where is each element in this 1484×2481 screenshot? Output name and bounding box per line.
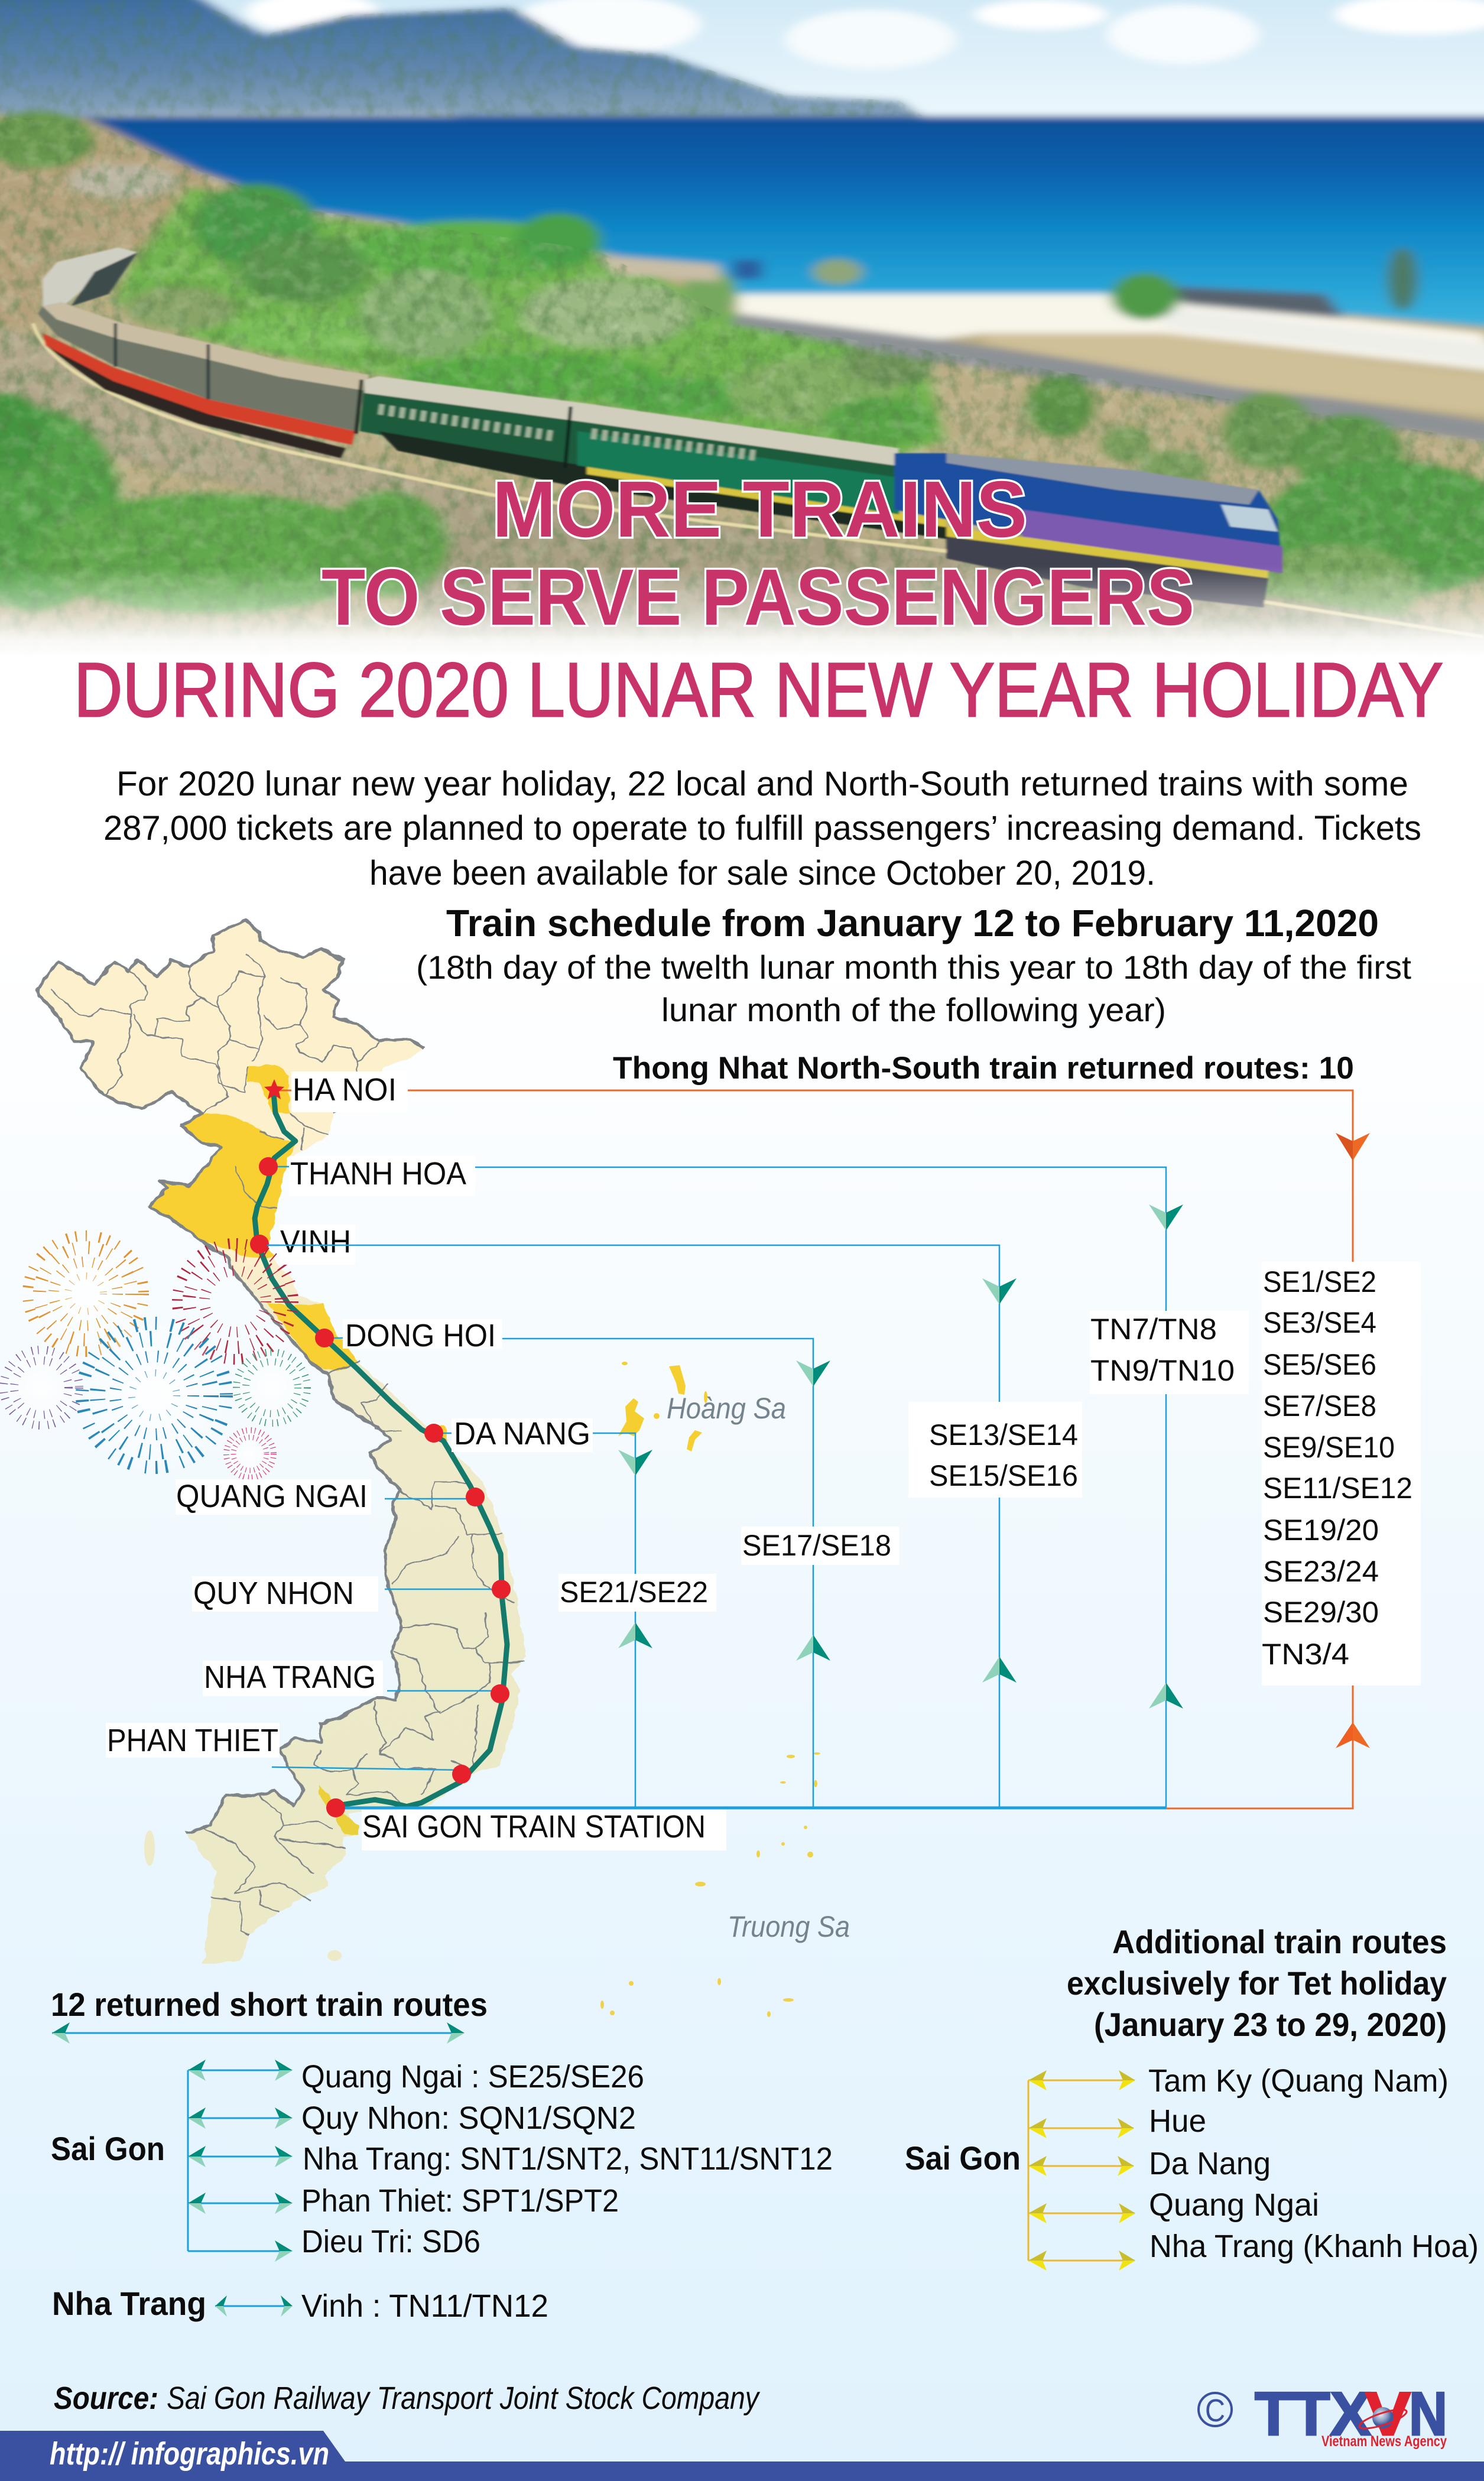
North-South routes heading: Thong Nhat North-South train returned routes: 10 — [613, 1051, 1354, 1086]
codes: Thong Nhat list: SE5/SE6 — [1263, 1348, 1376, 1381]
firework: orange — [22, 1230, 150, 1358]
marker: Ha Noi star — [264, 1079, 284, 1099]
footer bar — [0, 2431, 1484, 2481]
title line 1: MORE TRAINS — [492, 465, 1027, 554]
codes: Thong Nhat list — [1262, 1265, 1412, 1671]
route: Quy Nhon: Quy Nhon: SQN1/SQN2 — [301, 2100, 636, 2136]
icon: copyright: C — [1205, 2393, 1225, 2428]
route: Da Nang — [593, 1433, 635, 1808]
main trunk from Sai Gon — [338, 1806, 1166, 1810]
train — [33, 248, 1484, 637]
codes: Thong Nhat list: SE9/SE10 — [1263, 1431, 1395, 1464]
firework: red — [177, 1243, 293, 1359]
label: Hoang Sa: Hoàng Sa — [667, 1392, 786, 1425]
arrows on vertical routes — [618, 1133, 1370, 1748]
label: Da Nang: DA NANG — [454, 1416, 590, 1451]
route: Phan Thiet: Phan Thiet: SPT1/SPT2 — [301, 2183, 619, 2219]
schedule heading: Train schedule from January 12 to February 11,2020 — [446, 902, 1379, 944]
connector from Nha Trang — [215, 2295, 293, 2317]
logo: copyright and TTXVN — [1199, 2380, 1447, 2450]
Vinh leader passing over label — [267, 1245, 355, 1246]
province lines — [51, 954, 524, 1935]
fireworks — [0, 1230, 312, 1481]
label: Quang Ngai: QUANG NGAI — [176, 1479, 368, 1514]
codes: SE17/SE18: SE17/SE18 — [742, 1529, 891, 1562]
codes: SE13-SE16: SE15/SE16 — [929, 1459, 1078, 1492]
map base: land, provinces, border — [37, 920, 527, 1965]
train code labels — [558, 1262, 1421, 1686]
footer url: http:// infographics.vn — [50, 2436, 329, 2472]
connectors — [1028, 2070, 1135, 2271]
route: Ha Noi orange — [278, 1090, 1353, 1808]
label: Quy Nhon: QUY NHON — [193, 1576, 354, 1611]
intro paragraph — [103, 765, 1421, 892]
intro paragraph: For 2020 lunar new year holiday, 22 local and North-South returned trains with some — [116, 765, 1408, 803]
route: Dong Hoi — [502, 1339, 813, 1808]
photo grain — [0, 118, 1484, 659]
mountain texture — [0, 0, 927, 120]
land mass — [37, 920, 527, 1965]
leader lines from stations — [269, 1167, 492, 1770]
codes: Thong Nhat list: SE23/24 — [1263, 1555, 1379, 1588]
label: Dong Hoi: DONG HOI — [345, 1318, 496, 1353]
firework: pink — [223, 1427, 277, 1481]
map of Vietnam — [37, 920, 850, 2017]
codes: Thong Nhat list: SE11/SE12 — [1263, 1472, 1412, 1505]
heading arrow — [52, 2022, 465, 2044]
route: Vinh — [267, 1245, 999, 1808]
label: Vinh: VINH — [280, 1224, 351, 1259]
heading — [1067, 1923, 1447, 2043]
codes: SE13-SE16 — [929, 1418, 1078, 1492]
codes: Thong Nhat list: SE1/SE2 — [1263, 1265, 1376, 1298]
title — [74, 465, 1443, 733]
route: Quang Ngai: Quang Ngai — [1149, 2187, 1319, 2223]
border line — [37, 920, 424, 1833]
codes: Thong Nhat list: SE19/20 — [1263, 1514, 1379, 1547]
wordmark: N — [1409, 2380, 1447, 2448]
route: Nha Trang: Nha Trang (Khanh Hoa) — [1149, 2229, 1479, 2264]
route: Thanh Hoa — [475, 1167, 1166, 1808]
schedule sub-heading: lunar month of the following year) — [661, 991, 1166, 1028]
route: Vinh: Vinh : TN11/TN12 — [301, 2288, 548, 2324]
heading: (January 23 to 29, 2020) — [1094, 2006, 1447, 2043]
route: Nha Trang: Nha Trang: SNT1/SNT2, SNT11/SNT12 — [303, 2141, 833, 2177]
origin: Sai Gon: Sai Gon — [905, 2139, 1021, 2177]
heading: 12 returned short train routes — [51, 1986, 488, 2023]
hero bottom cover — [0, 656, 1484, 691]
codes: Thong Nhat list: SE3/SE4 — [1263, 1306, 1376, 1339]
codes: SE13-SE16: SE13/SE14 — [929, 1418, 1078, 1451]
wordmark: V — [1365, 2380, 1411, 2448]
intro paragraph: 287,000 tickets are planned to operate to fulfill passengers’ increasing demand. Tickets — [103, 809, 1421, 847]
label: Nha Trang: NHA TRANG — [204, 1660, 376, 1695]
connectors from Sai Gon — [188, 2060, 293, 2262]
route: Da Nang: Da Nang — [1149, 2146, 1271, 2181]
route: Quang Ngai: Quang Ngai : SE25/SE26 — [301, 2059, 644, 2094]
schedule sub-heading — [416, 949, 1411, 1028]
schedule sub-heading: (18th day of the twelth lunar month this year to 18th day of the first — [416, 949, 1411, 986]
railway line — [255, 1090, 507, 1807]
wordmark: TTX — [1255, 2380, 1371, 2448]
codes: Thong Nhat list: SE29/30 — [1263, 1596, 1379, 1629]
firework: purple — [0, 1345, 84, 1430]
firework: blue — [76, 1317, 232, 1473]
codes: TN7-TN10: TN9/TN10 — [1090, 1354, 1235, 1387]
origin: Nha Trang: Nha Trang — [52, 2285, 206, 2322]
station labels — [106, 1071, 726, 1850]
islands — [144, 1362, 820, 2017]
firework: green — [232, 1347, 312, 1428]
origin: Sai Gon: Sai Gon — [51, 2130, 165, 2167]
label: Sai Gon train station: SAI GON TRAIN STATION — [362, 1809, 706, 1844]
route lines — [267, 1090, 1353, 1808]
intro paragraph: have been available for sale since October 20, 2019. — [369, 854, 1155, 892]
hero photo: train along the coast — [0, 0, 1484, 676]
heading: Additional train routes — [1112, 1923, 1447, 1960]
icon: copyright — [1199, 2393, 1232, 2428]
title line 2: TO SERVE PASSENGERS — [322, 553, 1194, 642]
label: Phan Thiet: PHAN THIET — [107, 1723, 278, 1758]
label: Ha Noi: HA NOI — [293, 1072, 397, 1108]
codes: TN7-TN10: TN7/TN8 — [1090, 1313, 1217, 1346]
route: Dieu Tri: Dieu Tri: SD6 — [301, 2224, 480, 2259]
highlighted provinces — [150, 1064, 449, 1835]
island labels — [667, 1392, 850, 1943]
wordmark — [1255, 2380, 1447, 2448]
white fade at photo bottom — [0, 566, 1484, 659]
panel: short train routes — [51, 1986, 833, 2324]
codes: TN7-TN10 — [1090, 1313, 1235, 1387]
source: Source: — [54, 2381, 158, 2416]
source: Sai Gon Railway Transport Joint Stock Company — [167, 2381, 761, 2416]
agency name: Vietnam News Agency — [1321, 2433, 1447, 2450]
label: Truong Sa: Truong Sa — [728, 1910, 850, 1943]
codes: SE21/SE22: SE21/SE22 — [560, 1576, 708, 1609]
panel: additional Tet routes — [905, 1923, 1479, 2271]
route: Hue: Hue — [1149, 2103, 1206, 2139]
codes: Thong Nhat list: SE7/SE8 — [1263, 1389, 1376, 1423]
heading: exclusively for Tet holiday — [1067, 1964, 1447, 2002]
route: Tam Ky: Tam Ky (Quang Nam) — [1148, 2063, 1449, 2099]
codes: Thong Nhat list: TN3/4 — [1262, 1638, 1349, 1671]
station markers — [250, 1079, 511, 1817]
label: Thanh Hoa: THANH HOA — [290, 1156, 466, 1191]
